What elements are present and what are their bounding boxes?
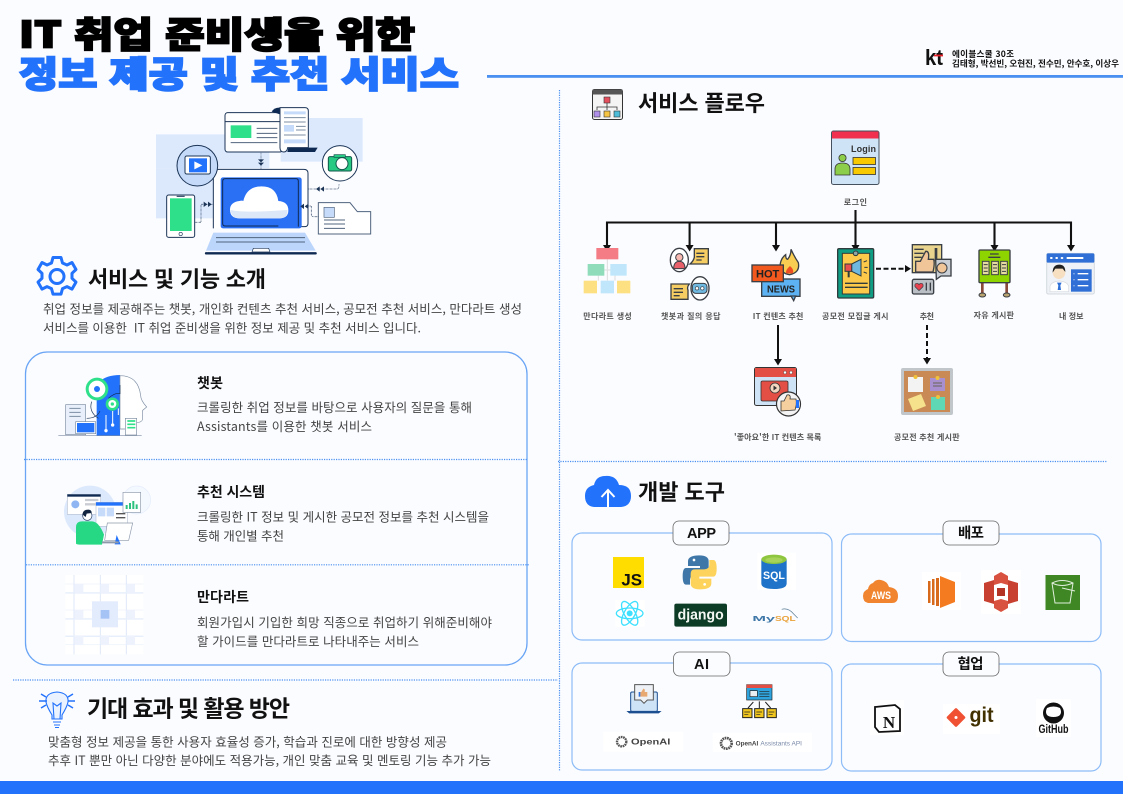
section: expected effects: 추후 IT 뿐만 아닌 다양한 분야에도 적용가능, 개인 맞춤 교육 및 멘토링 기능 추가 가능 bbox=[48, 750, 491, 769]
chart: service flow diagram: 자유 게시판 bbox=[974, 310, 1015, 321]
service description: 취업 정보를 제공해주는 챗봇, 개인화 컨텐츠 추천 서비스, 공모전 추천 서비스, 만다라트 생성 bbox=[43, 298, 522, 318]
logo: OpenAI: OpenAI bbox=[631, 738, 670, 747]
arrow: contest to recommendation bbox=[876, 265, 911, 272]
panel: deploy tools bbox=[842, 521, 1101, 642]
team credit with kt logo: kt bbox=[925, 45, 944, 70]
icon: login: Login bbox=[851, 144, 876, 154]
chart: service flow diagram: 공모전 추천 게시판 bbox=[894, 432, 960, 443]
icon: SQL database bbox=[757, 553, 796, 590]
panel: service features card: 크롤링한 취업 정보를 바탕으로 사용자의 질문을 통해 bbox=[197, 397, 472, 416]
icon: JavaScript: JS bbox=[621, 570, 642, 589]
icon: Notion: N bbox=[883, 713, 896, 732]
icon: login bbox=[832, 131, 879, 184]
chart: service flow diagram: IT 컨텐츠 추천 bbox=[753, 311, 803, 322]
icon: MySQL: SQL bbox=[775, 614, 796, 623]
panel: AI tools bbox=[572, 652, 832, 770]
chart: service flow diagram: '좋아요'한 IT 컨텐츠 목록 bbox=[734, 432, 822, 443]
logo: OpenAI bbox=[603, 732, 683, 752]
chart: service flow diagram: 챗봇과 질의 응답 bbox=[661, 311, 721, 322]
section: expected effects: 맞춤형 정보 제공을 통한 사용자 효율성 증가, 학습과 진로에 대한 방향성 제공 bbox=[48, 731, 447, 750]
icon: hot news: HOT bbox=[756, 269, 780, 281]
icon: liked IT contents bbox=[754, 368, 800, 416]
icon: Python bbox=[683, 555, 717, 589]
icon: GitHub: GitHub bbox=[1038, 722, 1068, 736]
section heading: dev tools bbox=[585, 475, 725, 507]
icon: EC2 bbox=[922, 572, 961, 610]
icon: cloud upload bbox=[585, 476, 631, 507]
panel: service features card: 회원가입시 기입한 희망 직종으로 취업하기 위해준비해야 bbox=[197, 612, 492, 631]
section heading: service and features bbox=[38, 258, 266, 294]
icon: django bbox=[674, 604, 727, 627]
icon: free board bbox=[979, 250, 1010, 297]
arrows: login branches bbox=[603, 210, 1075, 252]
panel: service features card: 만다라트 bbox=[197, 587, 249, 607]
service description: 서비스를 이용한 IT 취업 준비생을 위한 정보 제공 및 추천 서비스 입니다. bbox=[43, 318, 421, 336]
icon: my info bbox=[1047, 253, 1094, 294]
icon: MySQL bbox=[752, 609, 798, 623]
icon: Notion bbox=[870, 700, 904, 735]
icon: gear bbox=[38, 258, 76, 294]
title: 정보 제공 및 추천 서비스 bbox=[19, 46, 459, 98]
panel: service features card: 통해 개인별 추천 bbox=[197, 526, 284, 544]
icon: mandalart pale grid bbox=[65, 575, 143, 654]
panel: AI tools: AI bbox=[694, 657, 709, 673]
arrow: recommendation to contest board bbox=[923, 325, 931, 364]
panel: service features card: 챗봇 bbox=[197, 373, 223, 393]
chart: service flow diagram: 추천 bbox=[920, 311, 934, 322]
team credit with kt logo: 김태형, 박선빈, 오현진, 전수민, 안수호, 이상우 bbox=[952, 58, 1119, 70]
icon: recommendation system person bbox=[64, 486, 151, 545]
icon: flow diagram window bbox=[592, 90, 622, 120]
team credit with kt logo bbox=[925, 45, 1119, 70]
icon: hot news: NEWS bbox=[767, 285, 795, 296]
icon: git: git bbox=[970, 704, 994, 727]
section heading: service and features: 서비스 및 기능 소개 bbox=[88, 262, 266, 294]
panel: service features card: Assistants를 이용한 챗봇 서비스 bbox=[197, 416, 372, 435]
title bbox=[19, 6, 459, 98]
chart: service flow diagram: 로그인 bbox=[844, 197, 867, 208]
title: IT 취업 준비생을 위한 bbox=[19, 6, 415, 58]
icon: AWS cloud bbox=[863, 580, 898, 603]
icon: content aggregation bbox=[743, 685, 776, 718]
icon: SQL database: SQL bbox=[763, 570, 785, 582]
icon: light bulb bbox=[39, 692, 75, 728]
icon: S3 bucket bbox=[1046, 575, 1080, 610]
icon: contest posting bbox=[838, 249, 874, 298]
icon: mandalart hierarchy bbox=[584, 248, 630, 293]
icon: recommendation thumbs up bbox=[912, 245, 951, 294]
icon: hot news bbox=[752, 249, 800, 301]
icon: MySQL: My bbox=[752, 614, 777, 623]
service description bbox=[43, 298, 522, 336]
section heading: dev tools: 개발 도구 bbox=[638, 475, 725, 507]
logo: OpenAI Assistants API: Assistants API bbox=[760, 740, 802, 747]
icon: React bbox=[615, 599, 645, 628]
section heading: service flow: 서비스 플로우 bbox=[638, 86, 765, 118]
section: expected effects bbox=[39, 690, 491, 769]
icon: chatbot conversation bbox=[670, 248, 709, 300]
logo: OpenAI Assistants API: OpenAI bbox=[736, 740, 759, 747]
logo: OpenAI Assistants API bbox=[713, 733, 812, 752]
icon: laptop thumbs up bbox=[627, 685, 661, 713]
panel: collaboration tools: 협업 bbox=[958, 653, 984, 674]
section: expected effects: 기대 효과 및 활용 방안 bbox=[87, 690, 290, 724]
icon: S3 bbox=[981, 570, 1021, 614]
illustration: cloud laptop hub bbox=[156, 108, 371, 253]
chart: service flow diagram: 공모전 모집글 게시 bbox=[822, 311, 888, 322]
icon: GitHub bbox=[1036, 699, 1071, 737]
panel: service features card bbox=[24, 352, 529, 665]
icon: JavaScript bbox=[613, 557, 644, 589]
panel: APP tools bbox=[572, 521, 832, 640]
icon: git bbox=[943, 704, 1000, 734]
chart: service flow diagram bbox=[583, 131, 1094, 443]
chart: service flow diagram: 만다라트 생성 bbox=[583, 311, 632, 322]
icon: AWS cloud: AWS bbox=[871, 590, 891, 602]
panel: service features card: 할 가이드를 만다라트로 나타내주는 서비스 bbox=[197, 631, 419, 650]
icon: django: django bbox=[678, 607, 724, 623]
arrow: IT contents to liked list bbox=[774, 325, 782, 366]
icon: AI head chatbot bbox=[58, 375, 147, 436]
panel: APP tools: APP bbox=[687, 526, 716, 542]
chart: service flow diagram: 내 정보 bbox=[1059, 311, 1084, 322]
panel: service features card: 크롤링한 IT 정보 및 게시한 공모전 정보를 추천 시스템을 bbox=[197, 506, 489, 526]
panel: collaboration tools bbox=[842, 652, 1101, 771]
panel: deploy tools: 배포 bbox=[958, 522, 984, 543]
panel: service features card: 추천 시스템 bbox=[197, 482, 265, 502]
team credit with kt logo: 에이블스쿨 30조 bbox=[952, 48, 1014, 60]
icon: contest recommendation board bbox=[901, 368, 953, 415]
